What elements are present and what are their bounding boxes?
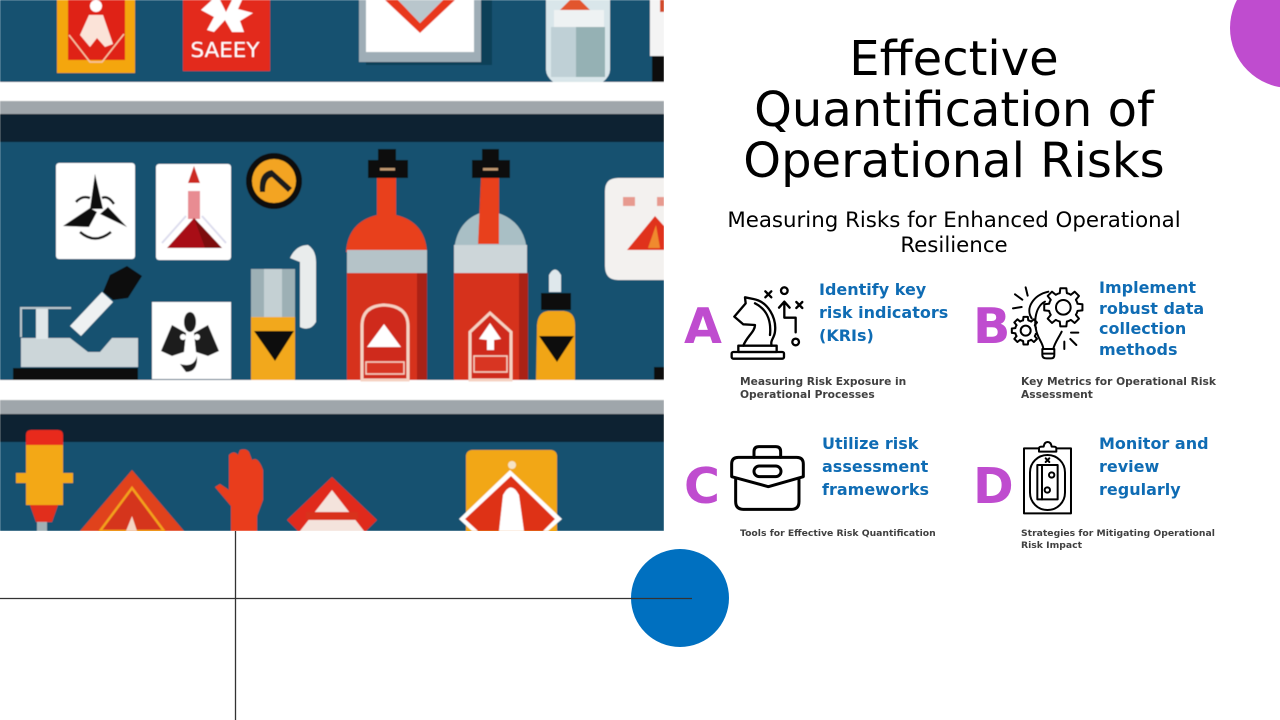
- heading B: robust data: [1099, 299, 1204, 318]
- item A: [684, 280, 948, 401]
- line: horizontal: [0, 598, 692, 600]
- description D: Risk Impact: [1021, 540, 1083, 551]
- sign: round orange hazard: [246, 153, 302, 209]
- subtitle: [727, 208, 1181, 258]
- sign: red triangle: [80, 470, 184, 531]
- description B: [1021, 375, 1217, 401]
- letter D: D: [973, 458, 1014, 515]
- sign: white framed red chevron: [359, 0, 492, 65]
- sign: yellow and red figure: [57, 0, 135, 73]
- sign: yellow square with red diamond: [459, 450, 562, 540]
- description D: Strategies for Mitigating Operational: [1021, 528, 1215, 539]
- heading C: Utilize risk: [822, 434, 919, 453]
- icon: chess knight strategy: [732, 287, 802, 359]
- bottle: pale with red tube: [454, 149, 528, 380]
- title: Quantification of: [754, 82, 1155, 138]
- item B: [973, 278, 1217, 401]
- heading D: Monitor and: [1099, 434, 1209, 453]
- description B: Key Metrics for Operational Risk: [1021, 375, 1217, 388]
- icon: clipboard: [1024, 442, 1071, 513]
- heading B: [1099, 278, 1204, 359]
- heading D: review: [1099, 457, 1160, 476]
- heading C: [822, 434, 929, 499]
- description A: Measuring Risk Exposure in: [740, 375, 906, 388]
- illustration: shelves of hazard signs and bottles: [0, 0, 664, 540]
- title: Effective: [849, 31, 1059, 87]
- line: vertical: [234, 531, 236, 720]
- heading D: [1099, 434, 1209, 499]
- description A: Operational Processes: [740, 388, 875, 401]
- description D: [1021, 528, 1215, 551]
- heading B: Implement: [1099, 278, 1196, 297]
- letter B: B: [973, 298, 1010, 355]
- icon: briefcase: [732, 447, 803, 509]
- sign: black radiation symbol: [56, 163, 135, 259]
- tube: white: [290, 245, 316, 329]
- letter A: A: [684, 298, 722, 355]
- title: Operational Risks: [743, 133, 1165, 189]
- heading A: [819, 280, 948, 345]
- item C: [684, 434, 936, 539]
- heading A: Identify key: [819, 280, 927, 299]
- description B: Assessment: [1021, 388, 1093, 401]
- sign: red diamond: [287, 477, 377, 531]
- heading B: collection: [1099, 319, 1186, 338]
- microscope: [13, 266, 142, 380]
- subtitle: Resilience: [900, 233, 1008, 258]
- title: [743, 31, 1165, 189]
- heading C: frameworks: [822, 480, 929, 499]
- item D: [973, 434, 1215, 551]
- icon: red hand: [215, 449, 263, 531]
- bottle: large red: [346, 149, 427, 380]
- description C: Tools for Effective Risk Quantification: [740, 528, 936, 539]
- beaker: yellow with black triangle: [251, 269, 295, 380]
- sign: black blob symbol: [152, 302, 231, 379]
- sign: red safety: SAEEY: [190, 38, 260, 62]
- heading D: regularly: [1099, 480, 1181, 499]
- circle: blue: [631, 549, 729, 647]
- bottle: small orange dropper: [536, 270, 575, 380]
- shelf block: [654, 367, 664, 380]
- middle shelf: [0, 380, 664, 442]
- icon: lightbulb with gears: [1012, 287, 1082, 358]
- heading A: (KRIs): [819, 326, 874, 345]
- sign: rounded with red triangle: [605, 178, 664, 280]
- circle: purple corner: [1230, 0, 1280, 88]
- marker: yellow and red: [16, 430, 73, 531]
- description A: [740, 375, 906, 401]
- letter C: C: [684, 458, 720, 515]
- sign: red safety: [183, 0, 270, 71]
- subtitle: Measuring Risks for Enhanced Operational: [727, 208, 1181, 233]
- sign: cut-off right: [650, 0, 664, 82]
- heading C: assessment: [822, 457, 929, 476]
- heading A: risk indicators: [819, 303, 948, 322]
- top shelf: [0, 82, 664, 142]
- sign: red flask: [156, 164, 231, 260]
- heading B: methods: [1099, 340, 1178, 359]
- bottle: pale glass: [546, 0, 610, 82]
